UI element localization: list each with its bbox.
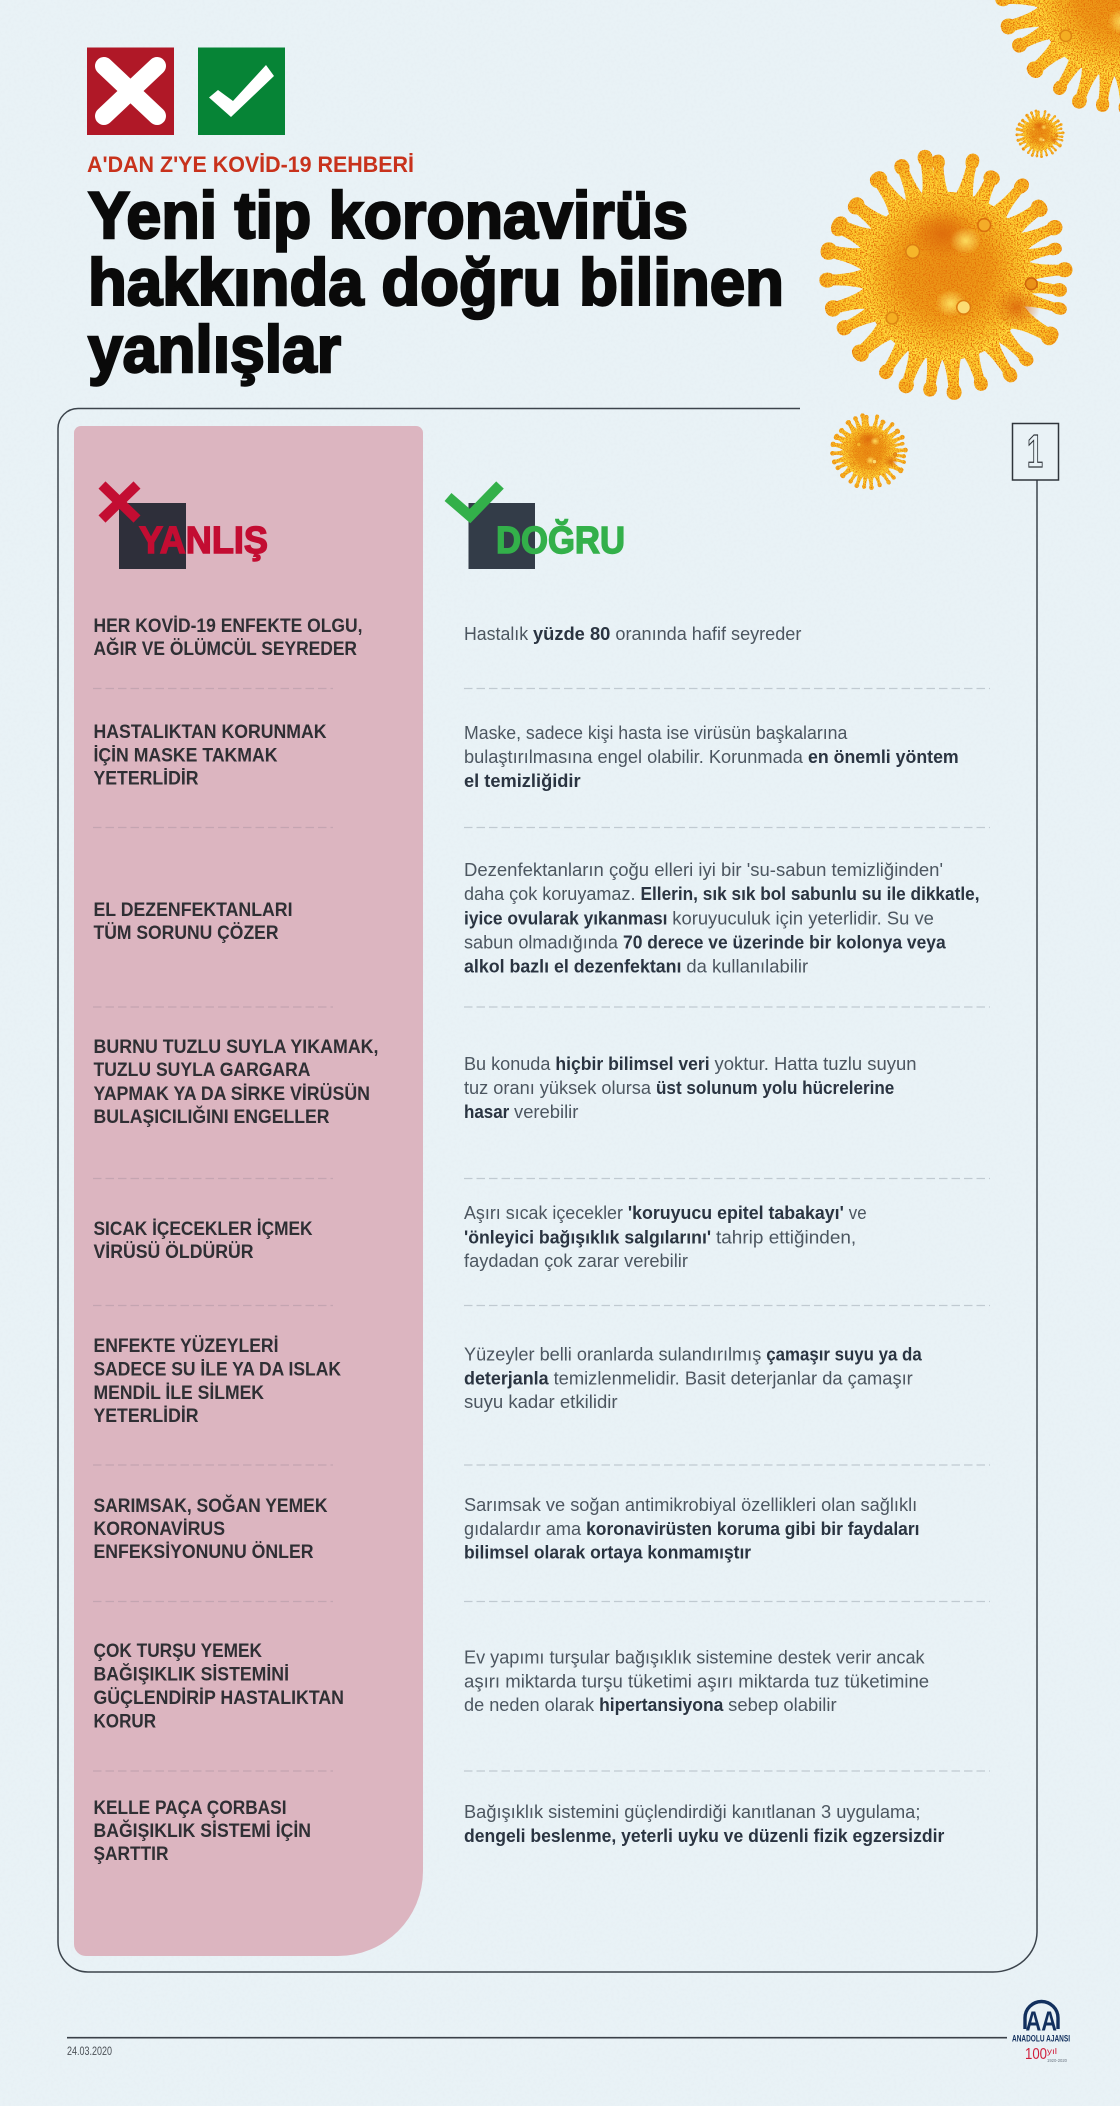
fact 1: oranında hafif seyreder [615, 623, 801, 644]
fact 6: suyu kadar etkilidir [464, 1391, 618, 1412]
myth 6: ENFEKTE YÜZEYLERİ [94, 1334, 278, 1357]
myth 5 [94, 1217, 312, 1263]
fact 6: deterjanla [464, 1368, 554, 1388]
myth 1 [94, 614, 362, 660]
myth 6: MENDİL İLE SİLMEK [94, 1381, 264, 1404]
fact 3: Dezenfektanların çoğu elleri iyi bir 'su-sabun temizliğinden' [464, 859, 943, 880]
fact 5: faydadan çok zarar verebilir [464, 1250, 688, 1271]
myth 5: VİRÜSÜ ÖLDÜRÜR [94, 1240, 254, 1263]
date: 24.03.2020 [67, 2044, 112, 2058]
fact 4: üst solunum yolu hücrelerine [656, 1077, 894, 1098]
fact 4 [464, 1053, 916, 1122]
logo: Anadolu Ajansi [1012, 2002, 1070, 2063]
myth 3: EL DEZENFEKTANLARI [94, 899, 292, 921]
fact 9: dengeli beslenme, yeterli uyku ve düzenli fizik egzersizdir [464, 1825, 944, 1846]
fact 9 [464, 1801, 944, 1846]
fact 2 [464, 722, 959, 791]
myth 9: ŞARTTIR [94, 1843, 168, 1865]
page number box: 1 [1027, 425, 1043, 477]
fact 2: el temizliğidir [464, 770, 581, 791]
fact 7 [464, 1494, 920, 1562]
myth 9: BAĞIŞIKLIK SİSTEMİ İÇİN [94, 1819, 311, 1842]
logo: Anadolu Ajansi: 1920-2020 [1047, 2058, 1067, 2063]
fact 7: bilimsel olarak ortaya konmamıştır [464, 1542, 751, 1562]
myth 3 [94, 899, 292, 944]
fact 8: sebep olabilir [728, 1694, 837, 1715]
fact 3: daha çok koruyamaz. [464, 883, 640, 904]
myth 2: HASTALIKTAN KORUNMAK [94, 721, 326, 743]
myth 4: BURNU TUZLU SUYLA YIKAMAK, [94, 1036, 378, 1058]
footer rule [67, 2037, 1007, 2039]
myth 4: BULAŞICILIĞINI ENGELLER [94, 1105, 330, 1128]
logo: Anadolu Ajansi: AA [1026, 2006, 1057, 2036]
icon: red cross square [87, 48, 174, 135]
myth 4 [94, 1036, 378, 1128]
fact 5: Aşırı sıcak içecekler [464, 1202, 628, 1223]
panel: wrong column background [74, 426, 423, 1956]
fact 4: tuz oranı yüksek olursa [464, 1077, 656, 1098]
myth 5: SICAK İÇECEKLER İÇMEK [94, 1217, 312, 1240]
fact 8: aşırı miktarda turşu tüketimi aşırı miktarda tuz tüketimine [464, 1670, 929, 1692]
fact 3: Ellerin, sık sık bol sabunlu su ile dikkatle, [640, 883, 980, 904]
virus: top right corner [993, 0, 1120, 116]
fact 5: 'önleyici bağışıklık salgılarını' [464, 1226, 716, 1248]
myth 7: KORONAVİRUS [94, 1517, 225, 1540]
fact 6 [464, 1344, 922, 1412]
logo: Anadolu Ajansi: 100 [1025, 2046, 1047, 2063]
row dividers [93, 688, 990, 1771]
myth 6: YETERLİDİR [94, 1404, 198, 1427]
myth 7: ENFEKSİYONUNU ÖNLER [94, 1540, 314, 1563]
fact 4: hiçbir bilimsel veri [555, 1053, 714, 1074]
myth 8: KORUR [94, 1710, 156, 1732]
myth 1: HER KOVİD-19 ENFEKTE OLGU, [94, 614, 362, 637]
fact 3: iyice ovularak yıkanması [464, 908, 672, 928]
subtitle: A'DAN Z'YE KOVİD-19 REHBERİ [87, 152, 414, 177]
fact 4: verebilir [514, 1101, 578, 1122]
fact 7: koronavirüsten koruma gibi bir faydaları [586, 1518, 920, 1539]
fact 8: de neden olarak [464, 1694, 599, 1715]
myth 7 [94, 1494, 328, 1563]
myth 8 [94, 1640, 344, 1732]
page number box [1012, 424, 1058, 480]
title [88, 178, 784, 386]
fact 3: sabun olmadığında [464, 932, 623, 952]
frame outline [58, 408, 1037, 1972]
fact 8 [464, 1646, 929, 1715]
myth 9 [94, 1797, 311, 1865]
title: hakkında doğru bilinen [88, 245, 784, 319]
title: Yeni tip koronavirüs [88, 178, 688, 252]
myth 9: KELLE PAÇA ÇORBASI [94, 1797, 286, 1819]
fact 9: Bağışıklık sistemini güçlendirdiği kanıtlanan 3 uygulama; [464, 1801, 920, 1822]
fact 2: en önemli yöntem [808, 746, 959, 767]
heading: YANLIŞ [102, 485, 268, 569]
myth 4: YAPMAK YA DA SİRKE VİRÜSÜN [94, 1082, 370, 1105]
heading: DOĞRU: DOĞRU [496, 518, 625, 562]
fact 1: yüzde 80 [533, 623, 615, 644]
fact 5 [464, 1202, 867, 1271]
myth 3: TÜM SORUNU ÇÖZER [94, 921, 278, 944]
fact 7: gıdalardır ama [464, 1518, 586, 1539]
myth 8: BAĞIŞIKLIK SİSTEMİNİ [94, 1662, 289, 1686]
virus: small lower [829, 413, 908, 490]
fact 7: Sarımsak ve soğan antimikrobiyal özellikleri olan sağlıklı [464, 1494, 917, 1515]
fact 2: Maske, sadece kişi hasta ise virüsün başkalarına [464, 722, 848, 743]
fact 4: hasar [464, 1101, 514, 1122]
myth 7: SARIMSAK, SOĞAN YEMEK [94, 1494, 328, 1517]
fact 6: temizlenmelidir. Basit deterjanlar da çamaşır [554, 1368, 913, 1388]
heading: YANLIŞ: YANLIŞ [139, 520, 268, 562]
title: yanlışlar [88, 312, 341, 386]
myth 6 [94, 1334, 341, 1427]
fact 1 [464, 623, 801, 644]
fact 8: Ev yapımı turşular bağışıklık sistemine destek verir ancak [464, 1646, 925, 1668]
myth 4: TUZLU SUYLA GARGARA [94, 1059, 310, 1081]
heading: DOĞRU [448, 485, 625, 569]
fact 2: bulaştırılmasına engel olabilir. Korunmada [464, 746, 808, 767]
icon: green check square [198, 48, 285, 135]
fact 3: 70 derece ve üzerinde bir kolonya veya [623, 932, 946, 952]
fact 6: çamaşır suyu ya da [766, 1344, 922, 1364]
myth 1: AĞIR VE ÖLÜMCÜL SEYREDER [94, 637, 357, 660]
fact 6: Yüzeyler belli oranlarda sulandırılmış [464, 1344, 766, 1364]
myth 6: SADECE SU İLE YA DA ISLAK [94, 1358, 341, 1380]
myth 8: GÜÇLENDİRİP HASTALIKTAN [94, 1686, 344, 1709]
fact 5: tahrip ettiğinden, [716, 1226, 856, 1248]
fact 4: Bu konuda [464, 1053, 555, 1074]
fact 8: hipertansiyona [599, 1694, 728, 1715]
fact 3: koruyuculuk için yeterlidir. Su ve [672, 908, 934, 928]
myth 2 [94, 721, 326, 790]
fact 1: Hastalık [464, 623, 533, 644]
fact 4: yoktur. Hatta tuzlu suyun [714, 1053, 916, 1074]
myth 2: İÇİN MASKE TAKMAK [94, 744, 278, 766]
virus: small top [1015, 109, 1065, 158]
myth 2: YETERLİDİR [94, 766, 198, 790]
myth 8: ÇOK TURŞU YEMEK [94, 1640, 262, 1662]
logo: Anadolu Ajansi: ANADOLU AJANSI [1012, 2034, 1070, 2045]
fact 5: ve [849, 1202, 867, 1223]
fact 3: alkol bazlı el dezenfektanı [464, 956, 686, 976]
logo: Anadolu Ajansi: yıl [1047, 2047, 1057, 2056]
virus: large [817, 147, 1073, 401]
fact 3: da kullanılabilir [686, 956, 808, 976]
fact 5: 'koruyucu epitel tabakayı' [628, 1202, 849, 1223]
fact 3 [464, 859, 980, 976]
